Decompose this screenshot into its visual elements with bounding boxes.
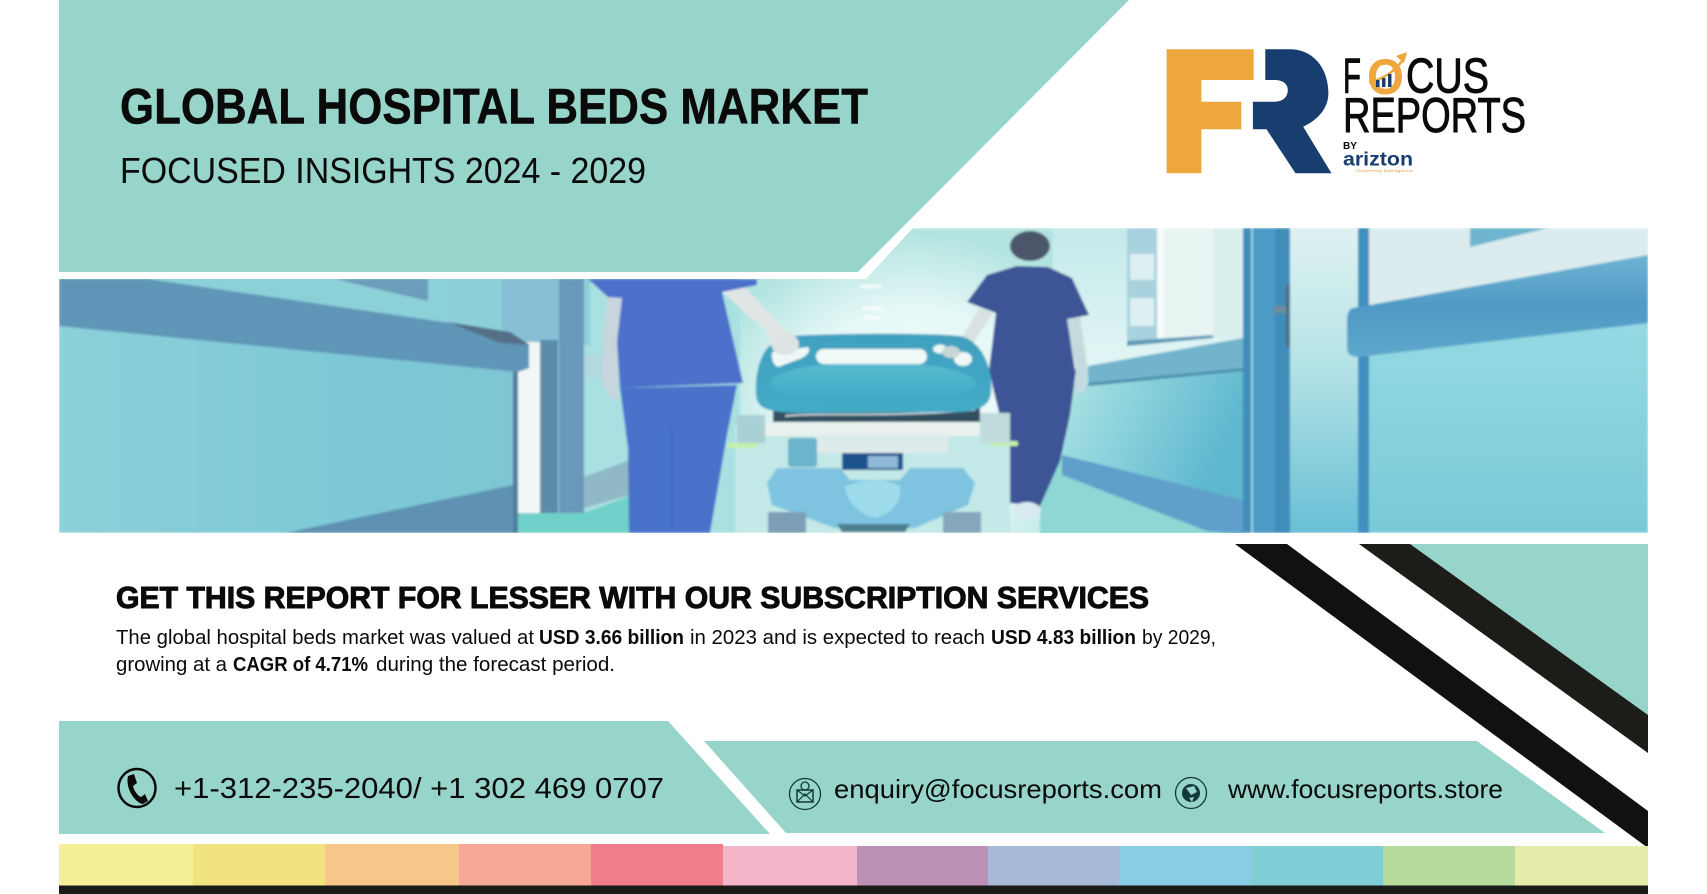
right corridor wall — [1062, 370, 1243, 500]
corridor floor left — [518, 496, 630, 533]
right corridor cabinet — [1127, 228, 1243, 346]
logo focus icon: rising arrow and bars — [1369, 52, 1407, 87]
logo wordmark: Focus: CUS — [1406, 50, 1489, 104]
logo mark: letter R — [1253, 49, 1332, 173]
right corridor baseboard — [1062, 455, 1243, 534]
nurse one: trousers — [620, 385, 737, 533]
left wall: lower panel — [159, 338, 514, 533]
door leaf — [1290, 228, 1358, 533]
bed: side posts — [737, 415, 765, 443]
bed: green pedals — [727, 443, 757, 448]
bed: head board highlights — [772, 344, 972, 367]
colour strip — [59, 844, 1648, 886]
right wall hand rail — [1347, 255, 1648, 357]
door handle — [1272, 284, 1291, 348]
right wall upper — [1367, 228, 1648, 306]
bed: control box — [817, 437, 948, 453]
bed — [727, 333, 1018, 533]
title: GLOBAL HOSPITAL BEDS MARKET — [120, 78, 868, 134]
market summary paragraph: USD 3.66 billion — [539, 626, 684, 649]
logo wordmark: Focus — [1343, 49, 1489, 105]
market summary paragraph: in 2023 and is expected to reach — [690, 626, 985, 649]
bed: dark cabling window — [842, 453, 903, 470]
black stripe outer — [1359, 544, 1648, 753]
icon: globe — [1176, 778, 1206, 808]
logo mark: letter F — [1167, 49, 1254, 173]
panel: title banner — [59, 0, 1129, 272]
left wall: baseboard — [285, 485, 513, 533]
teal corner — [1410, 544, 1648, 715]
logo Arizton tagline: Delivering Intelligence — [1356, 168, 1414, 173]
market summary paragraph: The global hospital beds market was valued at — [116, 626, 534, 649]
far wall baseboard beyond door — [584, 460, 630, 508]
icon: phone — [118, 769, 156, 807]
nurse two: shirt — [967, 266, 1089, 370]
nurse two: right arm — [1066, 317, 1088, 395]
panel: decorative stripes and teal corner — [1235, 544, 1648, 848]
subtitle: FOCUSED INSIGHTS 2024 - 2029 — [120, 150, 646, 191]
phone numbers: +1-312-235-2040/ +1 302 469 0707 — [174, 773, 664, 805]
black stripe inner — [1235, 544, 1648, 848]
bed: wheels — [768, 512, 981, 533]
black footer bar — [59, 886, 1648, 894]
nurse hands on bed — [771, 333, 960, 358]
panel: phone contact — [59, 721, 770, 834]
panel: email and website — [704, 741, 1605, 833]
far corridor upper wall — [1053, 228, 1243, 368]
market summary paragraph: USD 4.83 billion — [991, 626, 1136, 649]
door column — [1243, 228, 1290, 533]
corridor ceiling lights — [860, 285, 882, 319]
right corridor floor — [1039, 454, 1238, 533]
website address: www.focusreports.store — [1227, 774, 1503, 804]
nurse one: right arm — [722, 286, 787, 340]
market summary paragraph — [116, 626, 1216, 676]
bed: mattress and cables — [773, 407, 980, 422]
left door edge — [513, 368, 518, 533]
bed: base — [767, 468, 975, 532]
logo wordmark: Focus: O — [1367, 49, 1404, 105]
left wall: hand rail — [59, 279, 529, 372]
bed: head board — [756, 334, 991, 413]
bed: undercarriage glow — [735, 425, 1010, 533]
photo: hospital corridor with nurses and bed — [59, 228, 1648, 534]
nurse two: trousers — [989, 370, 1076, 506]
left door column — [559, 279, 584, 514]
market summary paragraph: CAGR of 4.71% — [233, 653, 368, 676]
market summary paragraph: by 2029, — [1142, 626, 1216, 649]
email address: enquiry@focusreports.com — [834, 774, 1162, 804]
left door panel — [450, 279, 502, 321]
nurse two: shoe — [1013, 502, 1041, 520]
logo wordmark: Reports: REPORTS — [1343, 89, 1526, 143]
nurse one: shirt — [588, 279, 757, 388]
right corridor rail — [1088, 338, 1243, 385]
right wall lower panel — [1369, 318, 1648, 533]
nurse two: left arm — [962, 308, 992, 342]
icon: email — [790, 778, 820, 810]
logo byline: BY — [1343, 140, 1357, 152]
left wall: picture frame — [335, 279, 428, 301]
logo: Focus Reports by Arizton — [1167, 49, 1526, 173]
market summary paragraph: growing at a — [116, 653, 228, 676]
far wall rail beyond door — [585, 356, 602, 376]
corridor background — [59, 279, 741, 514]
text block: subscription offer — [116, 580, 1216, 676]
bed: frame — [765, 423, 980, 436]
right wall framed sign — [1470, 228, 1548, 247]
nurse one: left arm — [603, 297, 622, 402]
nurse one — [588, 279, 797, 533]
market summary paragraph: during the forecast period. — [376, 653, 615, 676]
heading: GET THIS REPORT FOR LESSER WITH OUR SUBSCRIPTION SERVICES — [116, 580, 1149, 615]
nurse two: head — [1010, 231, 1050, 261]
logo wordmark: Focus: F — [1343, 50, 1361, 104]
bed: head board inset — [770, 362, 976, 404]
logo Arizton wordmark: arizton — [1343, 150, 1413, 170]
bed: motor block — [788, 438, 817, 467]
left wall: upper section — [583, 279, 590, 346]
nurse two — [960, 231, 1089, 520]
